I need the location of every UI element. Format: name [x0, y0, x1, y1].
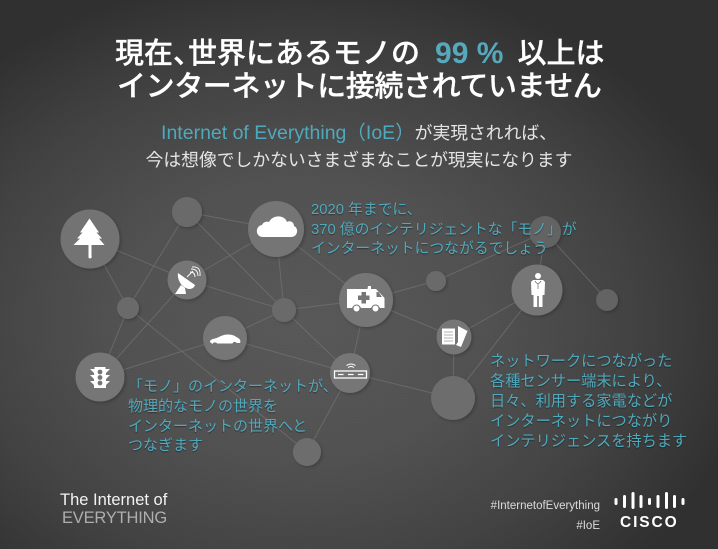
logo: Cisco: CISCO: [620, 514, 679, 531]
title: 現在、世界にあるモノの 99 % 以上は: [115, 37, 604, 70]
callout: sensors: 各種センサー端末により、: [490, 373, 671, 390]
hashtags: [490, 500, 600, 532]
callout: internet of things: 物理的なモノの世界を: [128, 398, 278, 415]
node: top small: [172, 197, 202, 227]
callout: sensors: インターネットにつながり: [490, 413, 672, 430]
callout: sensors: ネットワークにつながった: [490, 353, 672, 370]
node: ambulance: [339, 273, 393, 327]
subtitle: 今は想像でしかないさまざまなことが現実になります: [146, 150, 572, 170]
node: person: [512, 264, 562, 316]
logo: The Internet of Everything: EVERYTHING: [62, 509, 167, 527]
callout: 2020 forecast: 2020 年までに、: [311, 202, 422, 218]
node: tree: [60, 210, 120, 268]
node: small right: [426, 271, 446, 291]
callout: 2020 forecast: [311, 201, 577, 257]
callout: internet of things: [128, 378, 338, 454]
callout: internet of things: インターネットの世界へと: [128, 418, 307, 435]
logo: The Internet of Everything: The Internet of: [60, 491, 167, 509]
node: router: [330, 353, 370, 393]
node: far right: [596, 289, 618, 311]
callout: sensors: 日々、利用する家電などが: [490, 393, 672, 410]
callout: sensors: [490, 352, 687, 450]
title: [115, 37, 604, 103]
node: documents: [436, 320, 472, 354]
callout: internet of things: つなぎます: [128, 437, 203, 454]
title: インターネットに接続されていません: [117, 71, 601, 103]
callout: sensors: インテリジェンスを持ちます: [490, 433, 687, 450]
node: small center: [272, 298, 296, 322]
logo: Cisco: [614, 492, 684, 531]
callout: 2020 forecast: 370 億のインテリジェントな「モノ」が: [311, 222, 577, 238]
hashtags: #InternetofEverything: [491, 500, 600, 512]
subtitle: Internet of Everything（IoE）が実現されれば、: [161, 122, 557, 144]
logo: The Internet of Everything: [60, 491, 168, 527]
callout: 2020 forecast: インターネットにつながるでしょう: [311, 241, 548, 257]
node: car: [203, 316, 247, 360]
node: bottom: [293, 438, 321, 466]
hashtags: #IoE: [576, 520, 600, 532]
node: top right: [529, 216, 561, 248]
node: cloud: [248, 201, 304, 257]
subtitle: [146, 122, 572, 170]
callout: internet of things: 「モノ」のインターネットが、: [128, 378, 338, 395]
node: small left: [117, 297, 139, 319]
node: traffic light: [76, 352, 124, 402]
node: satellite dish: [168, 260, 206, 300]
node: big empty: [431, 376, 475, 420]
